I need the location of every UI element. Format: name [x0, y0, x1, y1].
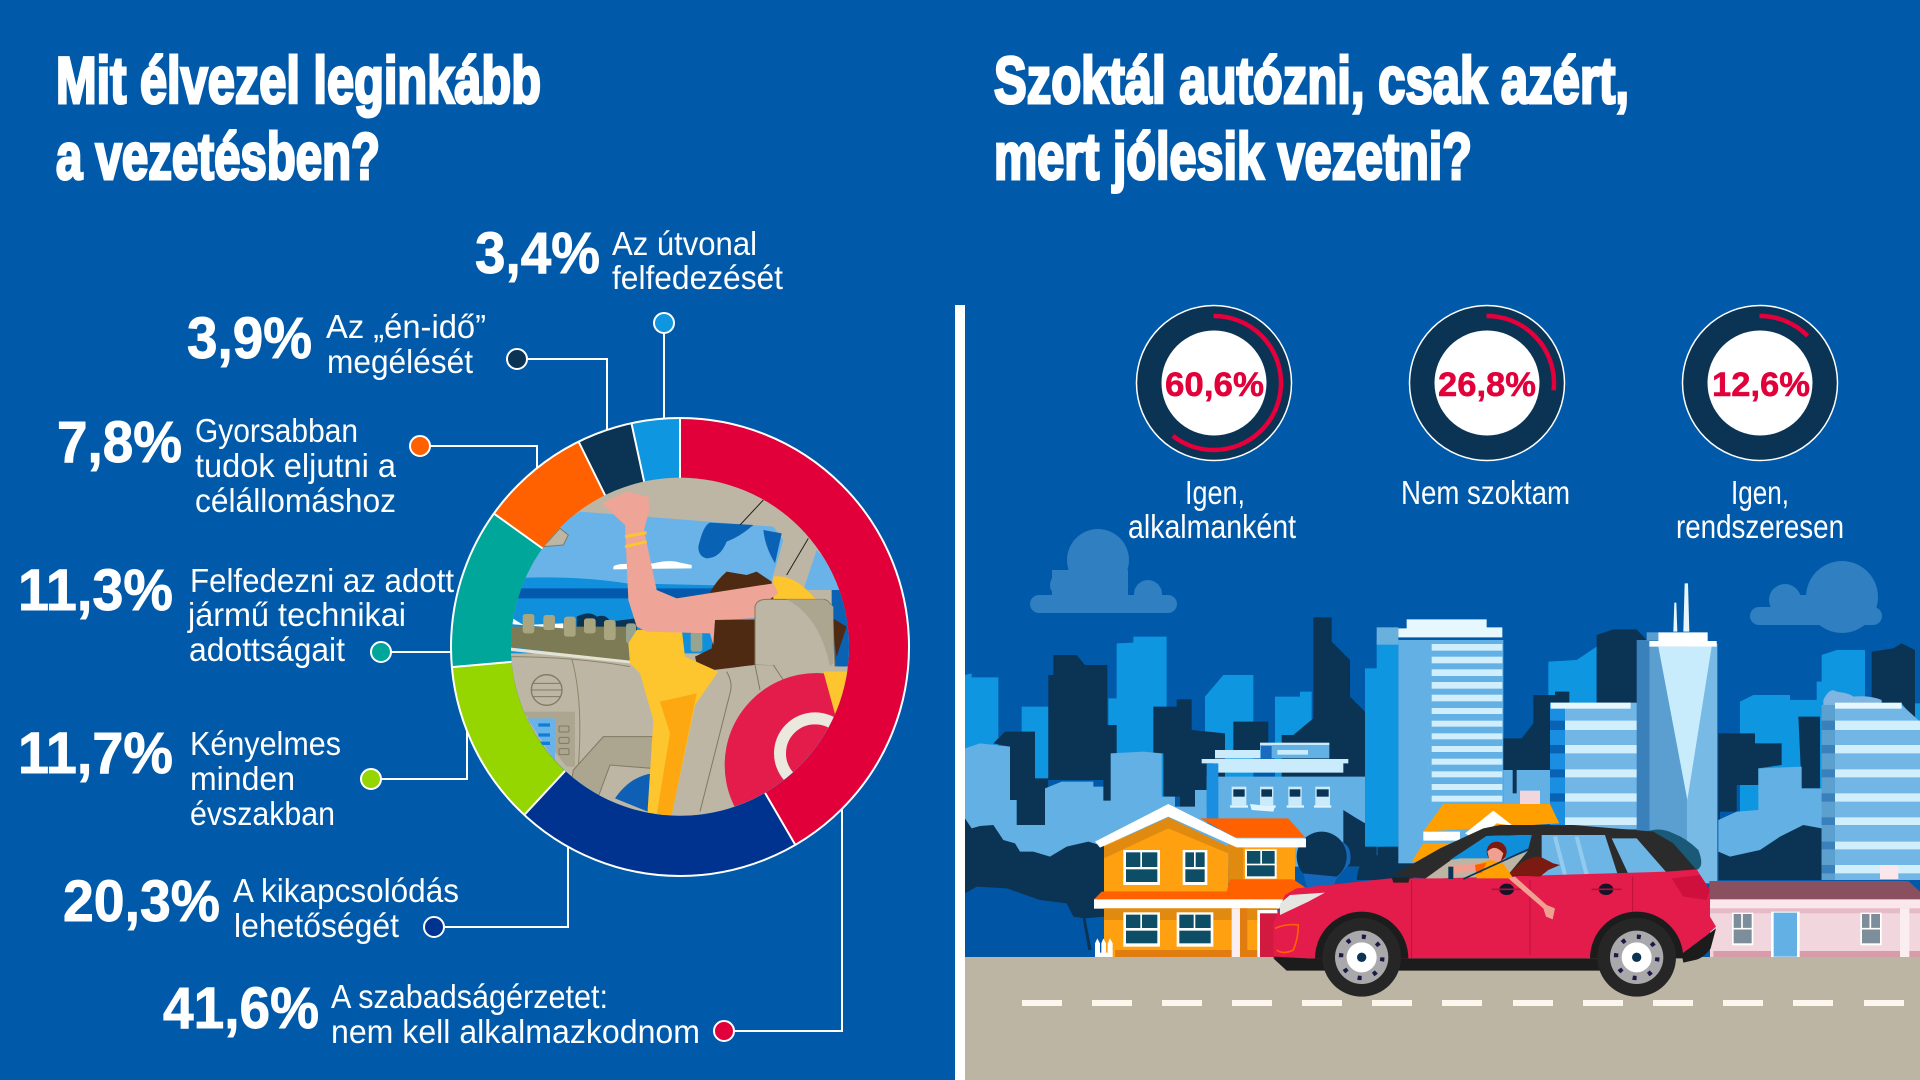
stat: 3,4%: 3,4%	[475, 221, 600, 286]
connector lines	[381, 333, 842, 1031]
city skyline right	[1412, 583, 1920, 961]
stat: 11,7%: 11,7%	[18, 721, 173, 786]
stat: 11,7%: évszakban	[190, 795, 335, 832]
stat: 41,6%: nem kell alkalmazkodnom	[331, 1013, 700, 1050]
cloud right	[1750, 561, 1882, 633]
stat: 41,6%	[163, 976, 734, 1050]
stat: 3,4%: Az útvonal	[612, 225, 757, 262]
stat: 20,3%	[63, 869, 459, 944]
white divider	[955, 305, 965, 1080]
stat: 11,3%: Felfedezni az adott	[190, 562, 454, 599]
stat: 7,8%: Gyorsabban	[195, 412, 358, 449]
stat: 11,3%: adottságait	[189, 631, 345, 668]
stat: 7,8%	[57, 410, 430, 519]
donut chart	[451, 418, 909, 876]
title left: a vezetésben?	[56, 119, 380, 193]
stat: 20,3%: lehetőségét	[234, 907, 399, 944]
gauge: 60,6% igen, alkalmanként: alkalmanként	[1128, 508, 1296, 545]
gauge: 60,6% igen, alkalmanként: 60,6%	[1165, 366, 1264, 404]
pink bungalow	[1709, 865, 1920, 961]
tower D	[1822, 690, 1920, 880]
panel: left survey	[18, 43, 909, 1050]
stat: 20,3%: A kikapcsolódás	[233, 872, 459, 909]
title right: Szoktál autózni, csak azért,	[994, 43, 1629, 117]
title left: Mit élvezel leginkább	[56, 43, 541, 117]
gauge: 12,6% igen, rendszeresen: Igen,	[1731, 474, 1789, 511]
glass tower	[1365, 619, 1503, 863]
stat: 7,8%: célállomáshoz	[195, 482, 396, 519]
tower B	[1550, 703, 1637, 829]
wheel rear	[1590, 912, 1683, 997]
wheel front	[1315, 912, 1408, 997]
stat: 7,8%: tudok eljutni a	[195, 447, 397, 484]
stat: 3,4%: felfedezését	[612, 259, 783, 296]
donut centre illustration: woman in car	[511, 478, 849, 816]
stat: 3,9%: megélését	[327, 343, 473, 380]
stat: 11,3%	[18, 558, 454, 668]
road	[965, 957, 1920, 1080]
stat: 41,6%: A szabadságérzetet:	[331, 978, 608, 1015]
gauge: 12,6% igen, rendszeresen: rendszeresen	[1676, 508, 1844, 545]
stat: 3,9%: Az „én-idő”	[326, 308, 486, 345]
title right: mert jólesik vezetni?	[994, 119, 1472, 193]
stat: 11,7%: Kényelmes	[190, 725, 341, 762]
stat: 11,3%: 11,3%	[18, 558, 173, 623]
illustration: red car with woman driver	[1273, 825, 1716, 997]
orange house	[1094, 804, 1307, 961]
gauge: 60,6% igen, alkalmanként	[1128, 306, 1296, 545]
title left	[56, 43, 541, 193]
small orange house behind car	[1412, 791, 1559, 865]
gauge: 26,8% nem szoktam: 26,8%	[1438, 366, 1536, 404]
gauge: 60,6% igen, alkalmanként: Igen,	[1185, 474, 1245, 511]
stat: 11,7%: minden	[190, 760, 295, 797]
stat: 11,3%: jármű technikai	[187, 596, 406, 633]
city skyline left	[965, 617, 1413, 957]
stat: 11,7%	[18, 721, 381, 832]
stat: 7,8%: 7,8%	[57, 410, 182, 475]
stat: 3,4%	[475, 221, 783, 333]
stat: 20,3%: 20,3%	[63, 869, 220, 934]
title right	[994, 43, 1629, 193]
gauge: 12,6% igen, rendszeresen	[1676, 306, 1844, 545]
stat: 3,9%	[187, 306, 527, 380]
driver	[1448, 842, 1560, 919]
gauge: 12,6% igen, rendszeresen: 12,6%	[1712, 366, 1810, 404]
gauge: 26,8% nem szoktam	[1401, 306, 1570, 511]
spire tower	[1637, 583, 1717, 883]
gauge: 26,8% nem szoktam: Nem szoktam	[1401, 474, 1570, 511]
cloud left	[1030, 529, 1177, 613]
stat: 41,6%: 41,6%	[163, 976, 319, 1041]
panel: right survey	[955, 43, 1920, 1080]
stat: 3,9%: 3,9%	[187, 306, 312, 371]
